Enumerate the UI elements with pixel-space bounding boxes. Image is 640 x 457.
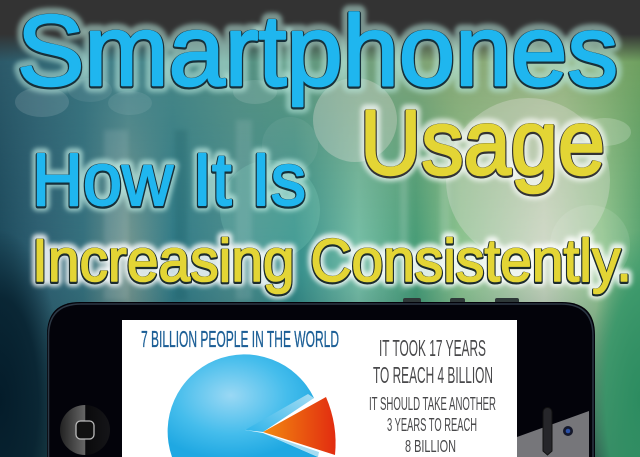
pie: blue share [168,354,318,457]
chart heading: 7 BILLION PEOPLE IN THE WORLD [141,326,339,352]
heading: How It Is: How It Is [32,138,306,221]
phone body [47,302,595,457]
heading: Usage: Usage [360,93,605,195]
stat text [369,335,496,456]
pie: lower band [263,433,319,457]
heading: How It Is: How It Is [32,139,306,222]
stat: 8 billion: 8 BILLION [405,436,456,456]
speaker [543,408,552,455]
side buttons [403,298,519,304]
stat: another: IT SHOULD TAKE ANOTHER [369,394,496,414]
heading: Usage: Usage [360,92,605,194]
pie: highlight band [245,394,314,432]
stat: 3 years: 3 YEARS TO REACH [387,415,477,435]
camera [563,426,573,436]
heading: Usage: Usage [360,92,605,194]
pie chart [168,354,336,457]
screen [122,320,517,457]
pie: orange slice [263,397,336,455]
phone [47,298,595,457]
heading: How It Is: How It Is [32,138,306,221]
stat: 17 years: IT TOOK 17 YEARS [379,335,486,361]
glare on the bezel [517,411,589,457]
stat: 4 billion: TO REACH 4 BILLION [373,362,493,388]
home button [60,405,110,455]
bokeh circles [15,78,631,285]
